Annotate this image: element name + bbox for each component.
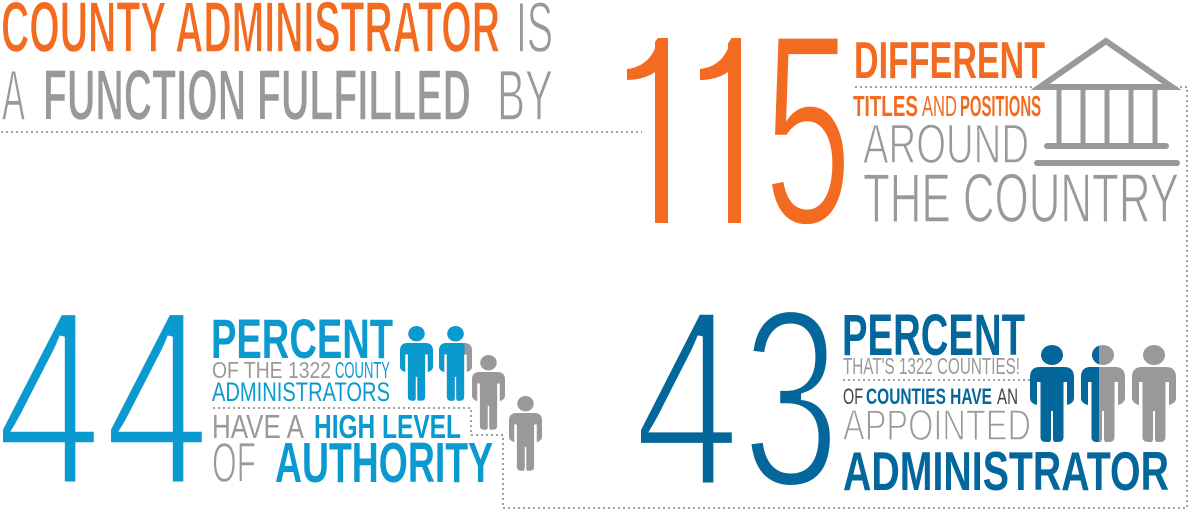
icon: person grey bbox=[509, 396, 542, 471]
stat: 43 percent bbox=[641, 312, 1176, 490]
label: different titles and positions: POSITIONS bbox=[960, 91, 1041, 123]
stat: 44 percent bbox=[3, 315, 542, 482]
label: around the country bbox=[863, 112, 1179, 237]
icon: person grey bbox=[1132, 345, 1176, 442]
title bbox=[1, 0, 553, 136]
icon: person blue bbox=[1030, 345, 1074, 442]
label: percent: PERCENT bbox=[211, 307, 393, 370]
icon: person grey bbox=[472, 355, 505, 430]
title: BY bbox=[497, 57, 553, 136]
stat: 115 different titles bbox=[620, 0, 1179, 282]
label: have a high level of authority: OF bbox=[212, 431, 256, 495]
label: have a high level of authority bbox=[212, 408, 493, 495]
icon: person half blue bbox=[1081, 345, 1125, 442]
label: of the 1322 county administrators: ADMINISTRATORS bbox=[212, 377, 390, 407]
title: FUNCTION FULFILLED bbox=[43, 56, 471, 136]
label: percent: PERCENT bbox=[842, 303, 1025, 368]
label: have a high level of authority: HAVE A bbox=[212, 408, 304, 445]
label: have a high level of authority: HIGH LEVEL bbox=[314, 408, 461, 445]
label: different titles and positions: TITLES bbox=[853, 91, 918, 123]
number 43 bbox=[634, 256, 840, 527]
number 115 bbox=[620, 0, 852, 282]
icon: courthouse bbox=[1037, 41, 1177, 163]
icon: person blue bbox=[400, 326, 433, 401]
label: different titles and positions bbox=[853, 32, 1045, 123]
label: different titles and positions: DIFFERENT bbox=[854, 32, 1045, 90]
icon: person mostly blue bbox=[439, 326, 472, 401]
label: of counties have an: COUNTIES HAVE bbox=[866, 384, 992, 409]
label: of the 1322 county administrators: COUNTY bbox=[335, 357, 390, 383]
label: different titles and positions: AND bbox=[922, 91, 957, 123]
label: of counties have an: OF bbox=[843, 384, 863, 409]
number 44 bbox=[0, 258, 210, 527]
dotted connector line bbox=[1, 87, 1187, 508]
label: have a high level of authority: AUTHORITY bbox=[275, 431, 493, 495]
label: of counties have an: AN bbox=[997, 384, 1018, 409]
label: around the country: AROUND bbox=[863, 112, 1029, 175]
label: appointed: APPOINTED bbox=[843, 401, 1031, 450]
label: that's 1322 counties: THAT'S 1322 COUNTIES! bbox=[843, 353, 1020, 379]
title: A bbox=[2, 57, 25, 136]
label: of the 1322 county administrators: OF THE 1322 bbox=[212, 357, 331, 383]
label: of the 1322 county administrators bbox=[212, 357, 390, 407]
